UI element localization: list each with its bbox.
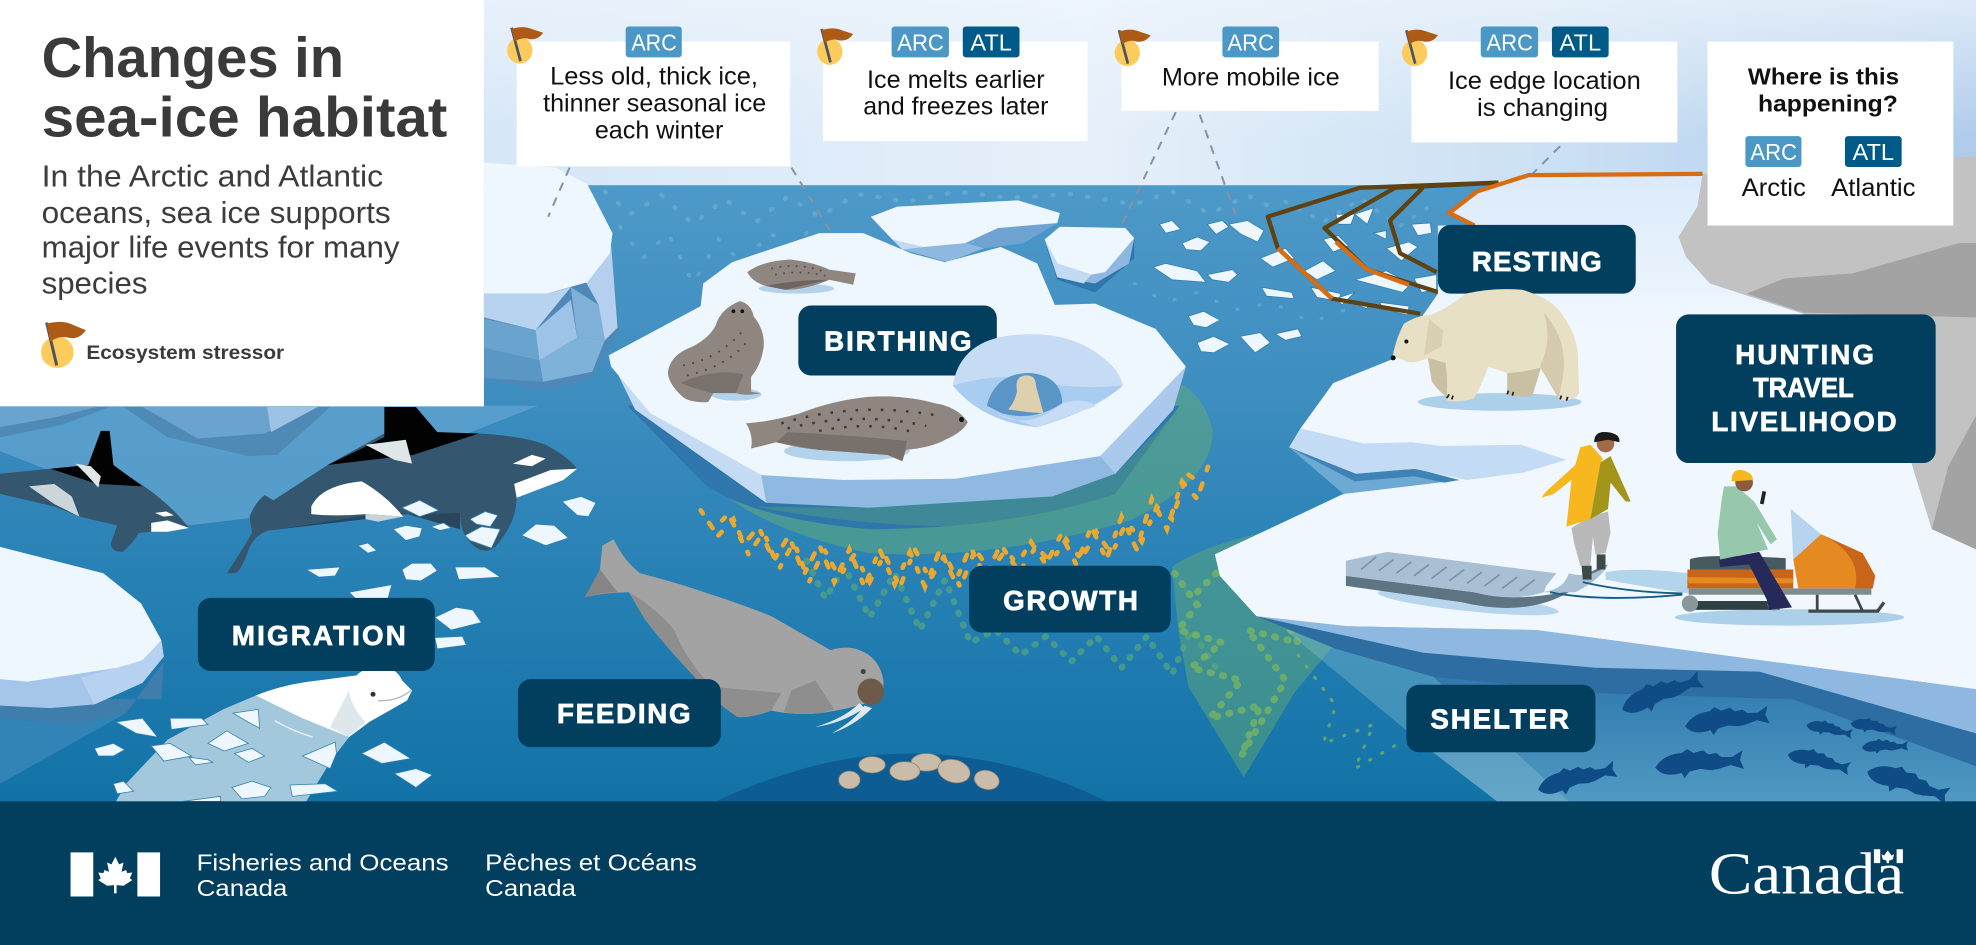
sky background (0, 0, 1976, 189)
under-ice zone (1256, 616, 1976, 801)
label: birthing: BIRTHING (824, 325, 972, 356)
ice notch facets (1289, 428, 1566, 494)
fish school (1535, 669, 1952, 813)
title (42, 27, 447, 150)
callout: old thick ice: thinner seasonal ice (543, 91, 766, 118)
rocky coast (1679, 156, 1976, 554)
region badge: ARC 2: ARC (897, 29, 944, 55)
legend panel: happening? (1758, 91, 1898, 117)
label: hunting travel livelihood: HUNTING (1735, 339, 1874, 370)
Canada wordmark: Canada (1709, 840, 1904, 906)
footer bar (0, 801, 1976, 945)
clams (839, 753, 1001, 792)
callout: old thick ice: Less old, thick ice, (550, 63, 758, 90)
water texture speckles (605, 192, 1437, 323)
label: birthing (798, 306, 997, 375)
legend panel: Arctic (1742, 175, 1806, 202)
department name (197, 850, 697, 901)
snow den with seal pup (953, 334, 1123, 427)
intro text: In the Arctic and Atlantic (42, 158, 383, 193)
green algae below sheet (1172, 533, 1336, 777)
callout: melts earlier: Ice melts earlier (867, 67, 1045, 94)
intro text: species (42, 266, 147, 301)
stressor flag 1 (507, 27, 543, 64)
orca: large (227, 407, 577, 573)
legend: ecosystem stressor (41, 322, 285, 368)
title: sea-ice habitat (42, 87, 447, 150)
title panel (0, 0, 484, 406)
right ice sheet (1215, 174, 1976, 733)
dashed leader lines (548, 112, 1560, 252)
label: migration (198, 598, 435, 671)
legend panel: ARC (1750, 139, 1797, 165)
callout: ice edge (1411, 42, 1677, 142)
sled (1346, 552, 1682, 621)
seal: sitting (668, 301, 764, 402)
callout: ice edge: is changing (1477, 95, 1608, 122)
ice floes near orcas and migration (306, 496, 596, 649)
ice lower left floe (0, 547, 164, 784)
legend panel: Atlantic (1831, 175, 1916, 202)
region badge: ARC 1: ARC (631, 29, 677, 55)
stressor flag 2 (817, 28, 853, 65)
person on snowmobile with orange cowl (1606, 470, 1904, 626)
plankton: orange specks (701, 461, 1210, 587)
intro text: major life events for many (42, 230, 400, 265)
orange current ice edge (1449, 174, 1703, 226)
left iceberg, upper (484, 163, 619, 391)
underwater iceberg shapes, left (0, 407, 330, 456)
department name: Canada (197, 875, 287, 901)
label: resting (1438, 225, 1636, 294)
region badge: ARC 4: ARC (1486, 29, 1533, 55)
callout: melts earlier (823, 42, 1088, 141)
polar bear (1391, 289, 1582, 411)
label: migration: MIGRATION (232, 620, 406, 651)
birthing floe shadow (628, 406, 1180, 529)
label: hunting travel livelihood (1676, 314, 1936, 463)
label: resting: RESTING (1472, 246, 1602, 277)
label: hunting travel livelihood: TRAVEL (1753, 372, 1854, 403)
label: growth: GROWTH (1003, 585, 1138, 616)
label: shelter (1406, 685, 1595, 752)
small floes: mobile ice (1153, 208, 1437, 353)
label: hunting travel livelihood: LIVELIHOOD (1711, 406, 1897, 437)
region badge: ATL 4 (1552, 26, 1609, 57)
ice floes around beluga (95, 709, 432, 801)
label: shelter: SHELTER (1430, 703, 1569, 734)
title: Changes in (42, 27, 344, 90)
green tint over shadow (756, 403, 1185, 527)
department name: Fisheries and Oceans (197, 850, 449, 876)
region badge: ATL 2: ATL (970, 29, 1012, 55)
region badge: ATL 2 (963, 26, 1020, 57)
callout: melts earlier: and freezes later (863, 94, 1048, 121)
region badge: ARC 3: ARC (1227, 29, 1274, 55)
government flag symbol (71, 852, 160, 896)
stressor flag 3 (1115, 30, 1151, 66)
seal: top (747, 260, 856, 294)
birthing floe (609, 233, 1186, 508)
region badge: ATL 4: ATL (1560, 29, 1601, 55)
ice edge lines (1268, 183, 1498, 314)
intro text (42, 158, 400, 301)
phytoplankton speckles (807, 561, 1399, 769)
intro text: oceans, sea ice supports (42, 195, 391, 230)
legend: ecosystem stressor: Ecosystem stressor (86, 342, 285, 364)
ocean background (0, 185, 1976, 803)
label: growth (969, 566, 1171, 633)
sea floor mound (716, 753, 1106, 801)
callout: old thick ice (517, 42, 790, 166)
callout: mobile ice (1122, 42, 1379, 111)
beluga whale (116, 667, 412, 801)
legend panel (1708, 42, 1953, 226)
stressor flag 4 (1402, 30, 1438, 66)
label: feeding (518, 679, 721, 747)
person in yellow jacket (1541, 432, 1631, 580)
department name: Canada (485, 875, 576, 901)
seal: lying (746, 396, 968, 461)
callout: mobile ice: More mobile ice (1162, 65, 1340, 92)
orca: small (0, 431, 189, 552)
top ice floe B (1045, 227, 1134, 292)
lighter water behind left icebergs (0, 406, 538, 525)
callout: old thick ice: each winter (595, 118, 723, 145)
department name: Pêches et Océans (485, 850, 697, 876)
callout: ice edge: Ice edge location (1448, 68, 1641, 95)
top ice floe A (871, 200, 1060, 262)
label: feeding: FEEDING (557, 698, 691, 729)
legend panel: Where is this (1748, 63, 1899, 89)
walrus (585, 539, 884, 733)
legend panel: ATL (1853, 139, 1894, 165)
green ice algae crescent (706, 384, 1212, 554)
